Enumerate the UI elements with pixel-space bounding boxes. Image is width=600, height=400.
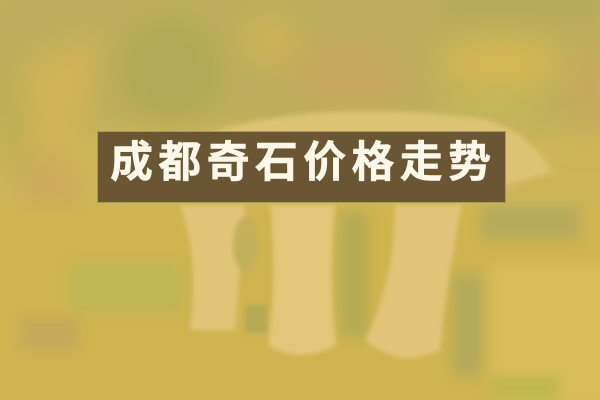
- lower foreground tones: [0, 205, 600, 400]
- title band: [98, 132, 505, 202]
- title: 成都奇石价格走势: [110, 139, 496, 187]
- upper background tones: [0, 0, 600, 225]
- mushroom stems and caps: [100, 111, 552, 358]
